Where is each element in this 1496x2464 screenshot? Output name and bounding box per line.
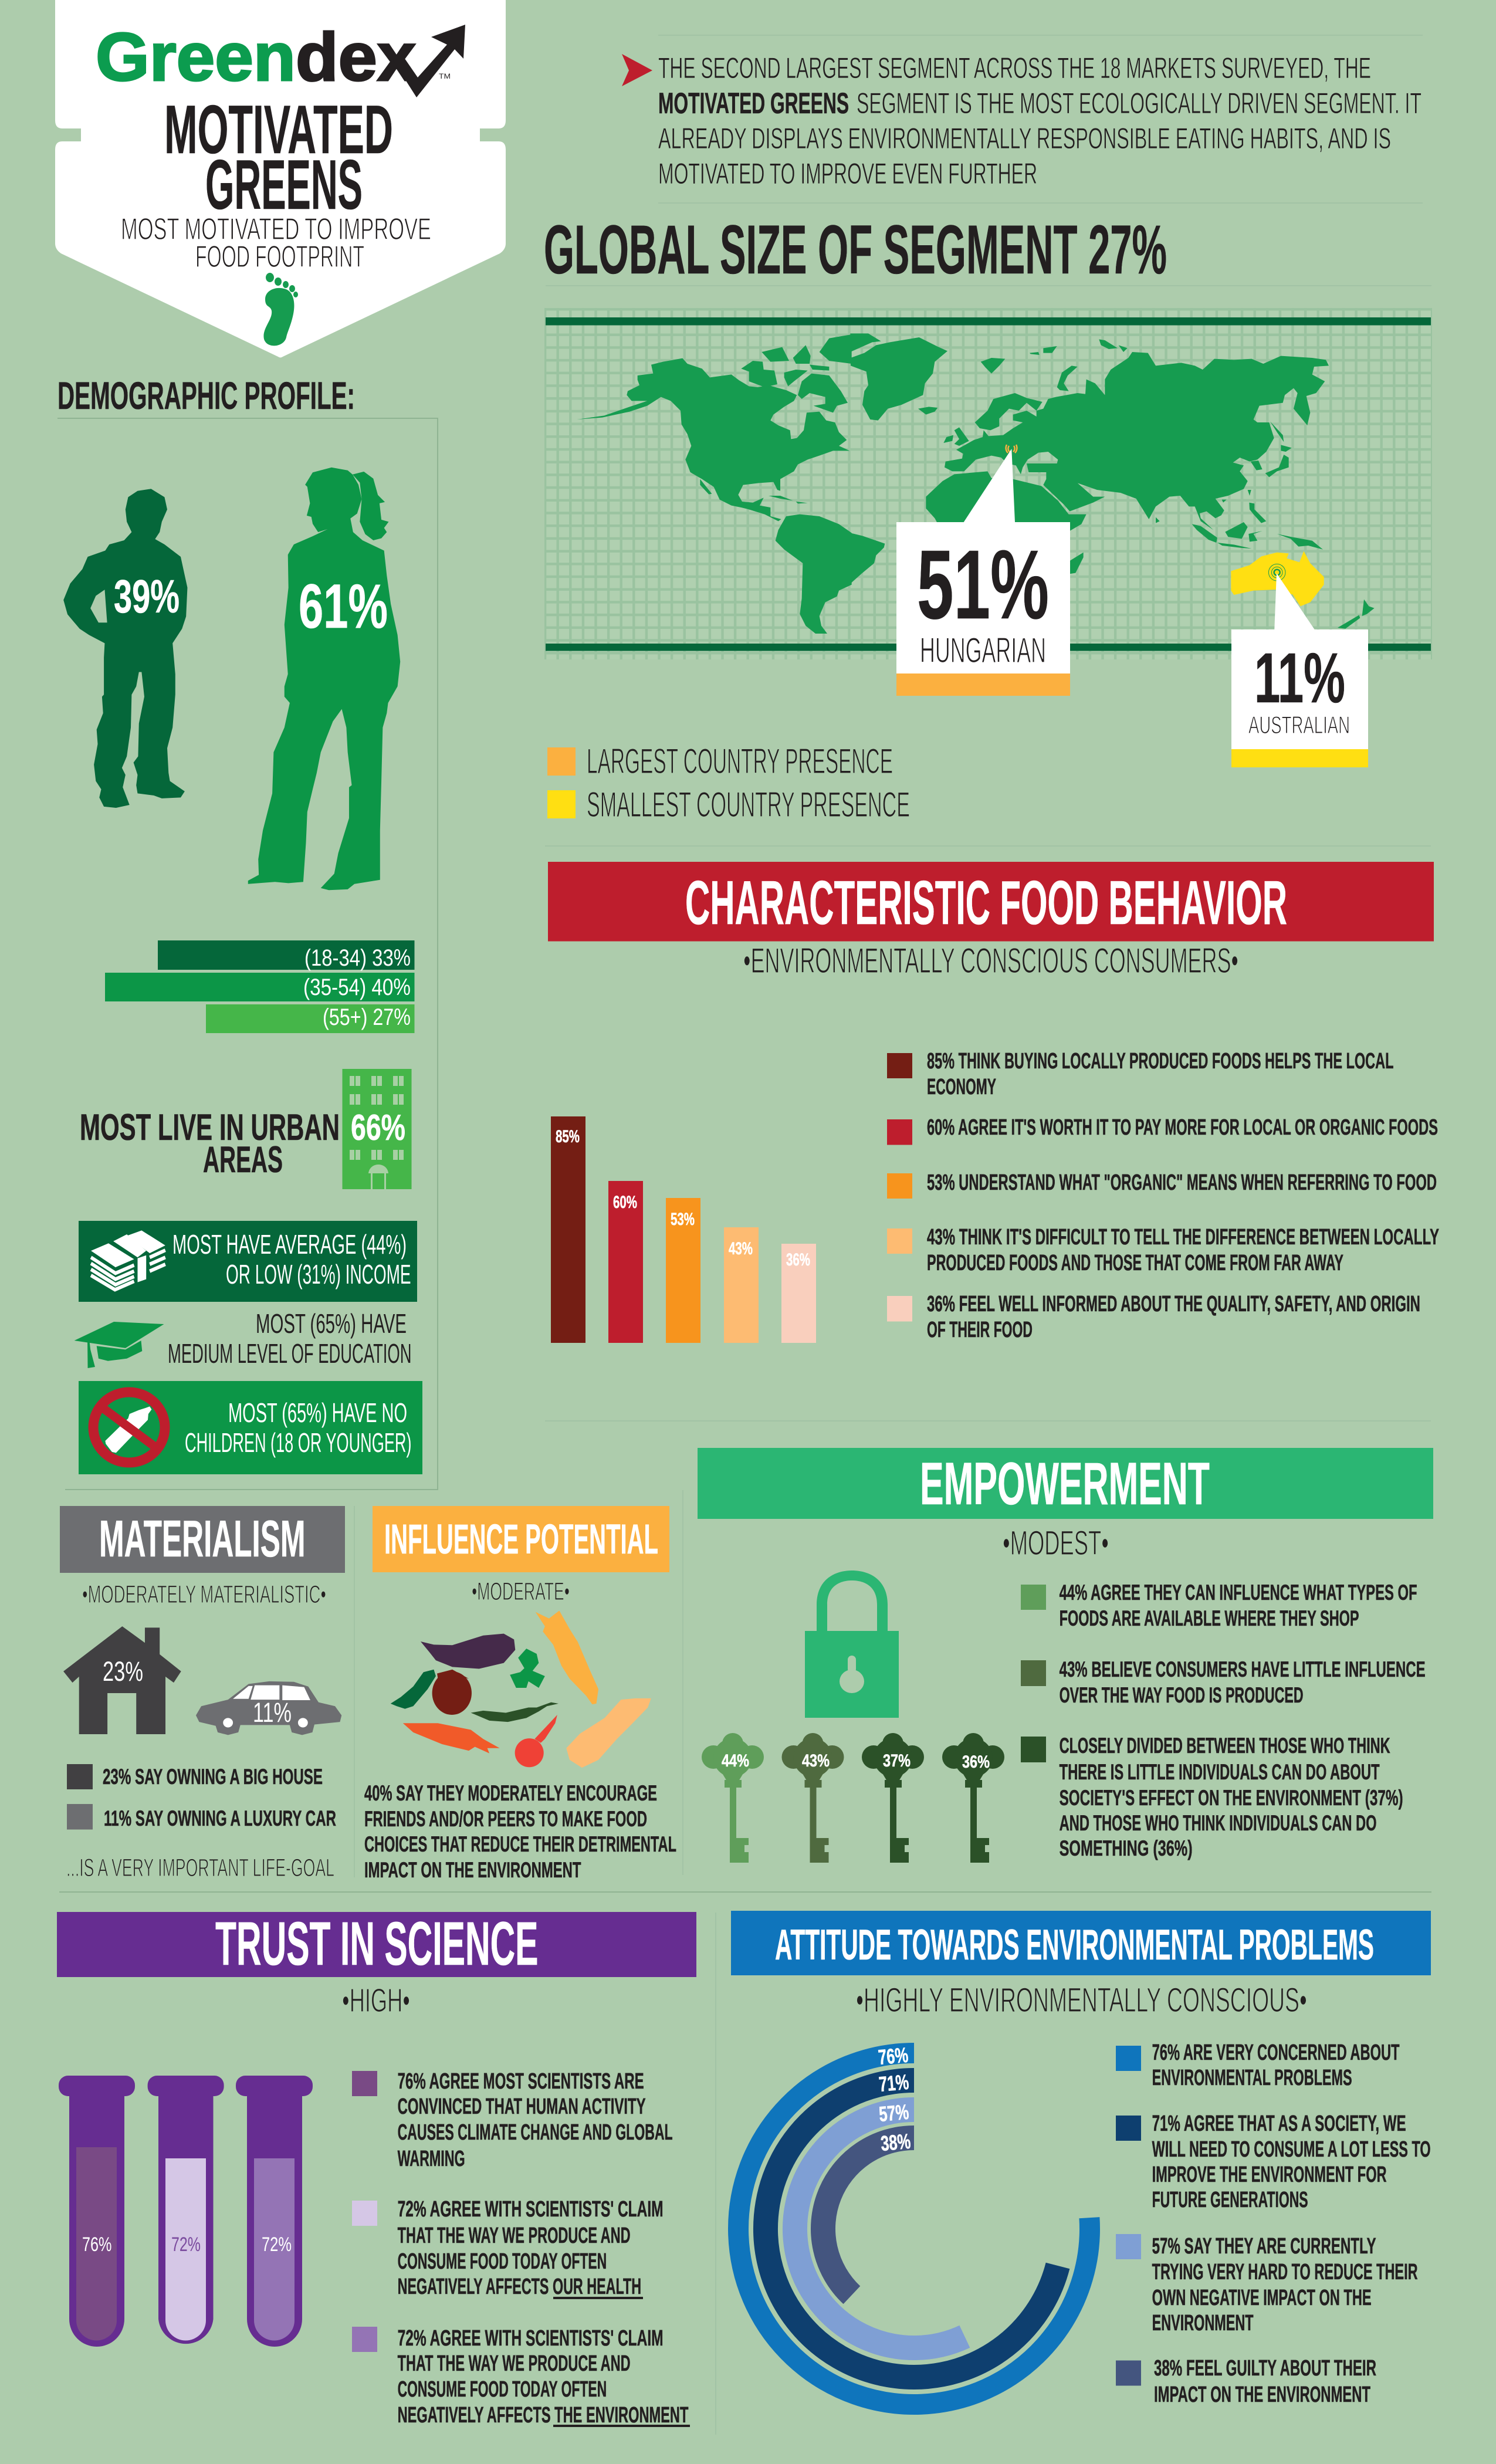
icon: no baby bottle (93, 1392, 165, 1463)
map: Australia highlighted (1231, 551, 1324, 606)
subtitle: MOST MOTIVATED TO IMPROVE (121, 212, 431, 246)
legend: 23% SAY OWNING A BIG HOUSE (103, 1765, 323, 1789)
callout: Hungarian 51% (896, 445, 1070, 696)
bar chart: 60% (613, 1193, 637, 1212)
icon: footprint (263, 273, 298, 346)
icon: building 66% (343, 1069, 412, 1189)
callout: Australian 11%: 11% (1254, 638, 1345, 717)
description (364, 1781, 676, 1882)
subtitle: FOOD FOOTPRINT (195, 240, 364, 274)
urban areas heading: MOST LIVE IN URBAN (80, 1107, 340, 1148)
bar chart (551, 1116, 816, 1343)
legend text: 72% AGREE WITH SCIENTISTS' CLAIM (398, 2326, 664, 2351)
subheading: •MODERATELY MATERIALISTIC• (82, 1580, 326, 1609)
panel: attitude towards environmental problems (731, 1911, 1431, 2407)
legend: 11% SAY OWNING A LUXURY CAR (104, 1806, 336, 1830)
heading: EMPOWERMENT (920, 1450, 1210, 1517)
legend text (1116, 2040, 1431, 2407)
key 37%: 37% (883, 1751, 911, 1771)
legend (67, 1764, 336, 1830)
icon: building 66%: 66% (351, 1108, 405, 1148)
map legend: SMALLEST COUNTRY PRESENCE (587, 785, 910, 824)
age bars: (55+) 27% (323, 1004, 411, 1030)
panel: demographics (63, 468, 422, 1474)
legend text: THAT THE WAY WE PRODUCE AND (398, 2351, 631, 2376)
legend text: CONVINCED THAT HUMAN ACTIVITY (398, 2094, 646, 2119)
panel: materialism (60, 1506, 345, 1882)
income box: MOST HAVE AVERAGE (44%) (172, 1229, 407, 1260)
key 37% (862, 1733, 924, 1863)
legend text: 38% FEEL GUILTY ABOUT THEIR (1154, 2356, 1376, 2381)
world map panel (544, 308, 1432, 767)
chart: test tubes (59, 2076, 313, 2347)
map legend: LARGEST COUNTRY PRESENCE (587, 742, 893, 781)
callout: Hungarian 51%: 51% (917, 530, 1049, 639)
heading: INFLUENCE POTENTIAL (384, 1517, 658, 1563)
callout: Australian 11%: AUSTRALIAN (1248, 711, 1350, 739)
logo: Greendex: TM (439, 72, 451, 80)
bar chart: 36% (786, 1250, 810, 1270)
icon: stack of money (91, 1230, 165, 1289)
icon: woman silhouette 61% (248, 468, 400, 890)
age bars: (35-54) 40% (303, 974, 411, 1000)
legend text: SOMETHING (36%) (1060, 1836, 1193, 1860)
logo: Greendex: Green (96, 19, 296, 95)
key 44% (702, 1733, 764, 1863)
tube 72% health (148, 2076, 224, 2344)
legend text: NEGATIVELY AFFECTS THE ENVIRONMENT (398, 2403, 688, 2428)
logo: Greendex (96, 19, 465, 97)
key 43% (781, 1733, 844, 1863)
tube 72% environment: 72% (262, 2233, 292, 2256)
key 44%: 44% (722, 1751, 749, 1771)
map legend (547, 742, 910, 824)
age bars (105, 940, 414, 1033)
legend text: OVER THE WAY FOOD IS PRODUCED (1060, 1683, 1304, 1707)
education line with graduation cap: MEDIUM LEVEL OF EDUCATION (168, 1338, 412, 1369)
heading: TRUST IN SCIENCE (215, 1910, 539, 1978)
description: FRIENDS AND/OR PEERS TO MAKE FOOD (364, 1807, 647, 1831)
tube 72% health: 72% (171, 2233, 201, 2256)
chart: concentric rings: 71% (878, 2070, 910, 2096)
bar chart: 85% (556, 1127, 580, 1146)
heading: demographic profile: DEMOGRAPHIC PROFILE: (57, 374, 355, 417)
callout: Hungarian 51%: HUNGARIAN (920, 631, 1046, 670)
legend text: ENVIRONMENT (1152, 2311, 1254, 2336)
tube 76%: 76% (82, 2233, 111, 2256)
legend text: THAT THE WAY WE PRODUCE AND (398, 2223, 631, 2248)
income box (79, 1221, 417, 1302)
legend text: NEGATIVELY AFFECTS OUR HEALTH (398, 2275, 641, 2299)
education line with graduation cap (75, 1308, 412, 1369)
subheading: •HIGH• (342, 1982, 410, 2019)
subtitle (121, 212, 431, 274)
description: CHOICES THAT REDUCE THEIR DETRIMENTAL (364, 1832, 676, 1856)
children box: CHILDREN (18 OR YOUNGER) (185, 1427, 412, 1458)
legend text: CAUSES CLIMATE CHANGE AND GLOBAL (398, 2120, 673, 2145)
icon: car 11%: 11% (253, 1697, 292, 1728)
legend text (887, 1049, 1439, 1342)
title: Motivated Greens (164, 91, 393, 224)
legend text: 76% AGREE MOST SCIENTISTS ARE (398, 2069, 644, 2094)
description: IMPACT ON THE ENVIRONMENT (364, 1858, 581, 1882)
legend text: OF THEIR FOOD (927, 1318, 1033, 1342)
tube 76% (59, 2076, 135, 2347)
age bars: (18-34) 33% (304, 945, 411, 971)
icon: woman silhouette 61%: 61% (299, 571, 388, 641)
legend text: WARMING (398, 2147, 465, 2171)
children box: MOST (65%) HAVE NO (228, 1397, 407, 1428)
chart: concentric rings: 38% (879, 2129, 912, 2155)
intro text with arrow: MOTIVATED TO IMPROVE EVEN FURTHER (658, 157, 1037, 190)
key 36% (942, 1733, 1004, 1863)
income box: OR LOW (31%) INCOME (226, 1259, 411, 1289)
legend text: FUTURE GENERATIONS (1152, 2188, 1308, 2212)
logo shield panel (55, 0, 506, 358)
heading: MATERIALISM (99, 1509, 305, 1568)
urban areas heading (80, 1107, 340, 1180)
chart: concentric rings: 57% (878, 2100, 910, 2126)
caption: ...IS A VERY IMPORTANT LIFE-GOAL (66, 1854, 334, 1882)
logo: Greendex: dex (296, 19, 416, 95)
map: Europe, Asia, Africa, Greenland (850, 333, 1375, 629)
children box (79, 1381, 422, 1474)
icon: house 23%: 23% (103, 1656, 143, 1687)
legend text: CONSUME FOOD TODAY OFTEN (398, 2377, 607, 2402)
chart: concentric rings (738, 2043, 1089, 2404)
intro text with arrow (622, 52, 1421, 190)
legend text: 57% SAY THEY ARE CURRENTLY (1152, 2234, 1376, 2259)
bar chart: 43% (729, 1239, 753, 1258)
panel: influence potential (364, 1506, 676, 1882)
icon: padlock (805, 1571, 899, 1718)
legend text (352, 2069, 690, 2428)
legend text: 72% AGREE WITH SCIENTISTS' CLAIM (398, 2197, 664, 2222)
icon: house 23% (63, 1626, 181, 1734)
title: Motivated Greens: GREENS (205, 145, 363, 224)
map: Americas and Arctic Canada (577, 334, 852, 634)
legend text: IMPACT ON THE ENVIRONMENT (1154, 2382, 1370, 2407)
icons: keys (702, 1733, 1004, 1863)
key 43%: 43% (802, 1751, 830, 1771)
legend text: ENVIRONMENTAL PROBLEMS (1152, 2066, 1352, 2090)
key 36%: 36% (962, 1752, 990, 1772)
subheading: •MODEST• (1003, 1524, 1109, 1562)
legend text: CONSUME FOOD TODAY OFTEN (398, 2249, 607, 2274)
panel: trust in science (57, 1910, 696, 2428)
icon: car 11% (196, 1681, 341, 1735)
icon: vegetables (391, 1610, 651, 1768)
legend text (1021, 1580, 1426, 1860)
legend text: ECONOMY (927, 1075, 996, 1099)
icon: man silhouette 39% (63, 489, 187, 808)
legend text: OWN NEGATIVE IMPACT ON THE (1152, 2286, 1372, 2310)
education line with graduation cap: MOST (65%) HAVE (256, 1308, 407, 1339)
icon: graduation cap (75, 1322, 164, 1368)
panel: characteristic food behavior (548, 862, 1439, 1343)
subheading: •MODERATE• (472, 1578, 570, 1606)
intro text with arrow: MOTIVATED GREENS (658, 87, 849, 120)
chart: concentric rings: 76% (877, 2043, 909, 2069)
bar chart: 53% (671, 1210, 695, 1229)
callout: Australian 11% (1231, 564, 1368, 767)
icon: man silhouette 39%: 39% (114, 570, 180, 622)
description: 40% SAY THEY MODERATELY ENCOURAGE (364, 1781, 657, 1805)
title: Motivated Greens: MOTIVATED (164, 91, 393, 168)
panel: empowerment (698, 1448, 1433, 1863)
urban areas heading: AREAS (203, 1139, 283, 1180)
tube 72% environment (236, 2076, 313, 2347)
